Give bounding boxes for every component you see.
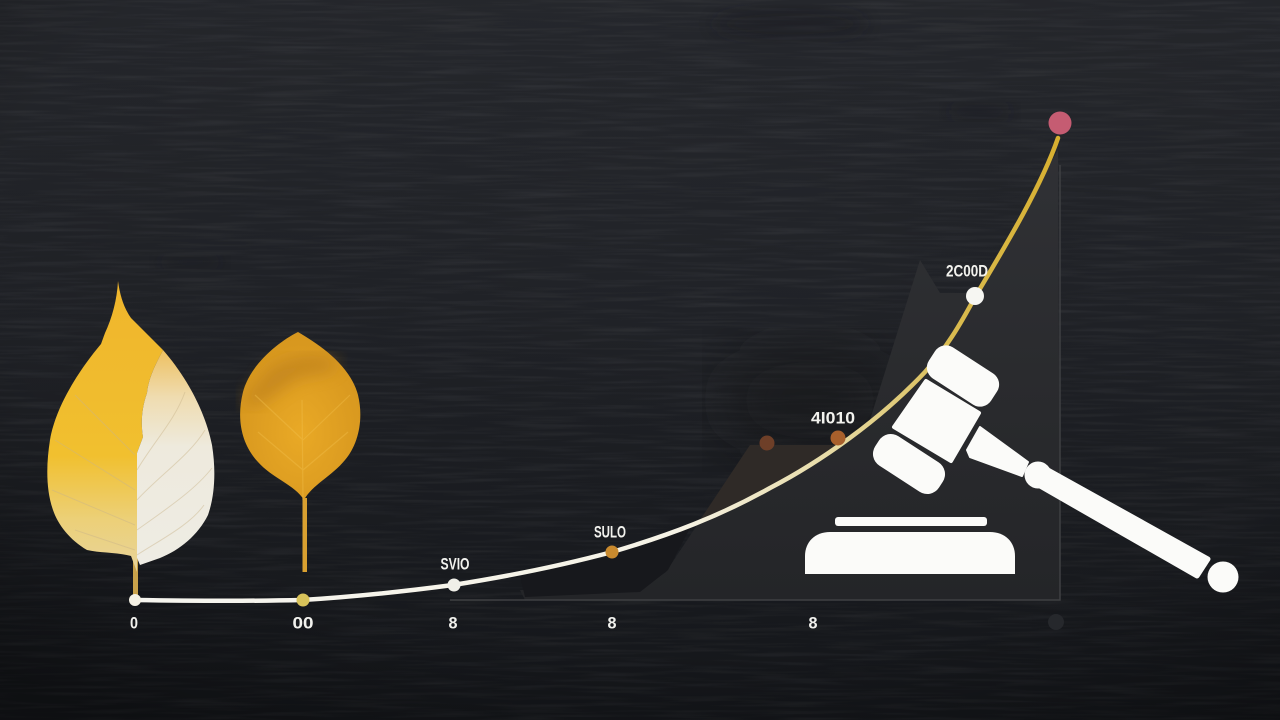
- icon: large yellow and white leaf: [47, 281, 214, 597]
- gavel handle: [1040, 470, 1208, 576]
- labels above the curve: 4I010: [811, 408, 855, 428]
- leaf stem: [302, 498, 307, 572]
- chart area: translucent grey panel under curve: [450, 150, 1060, 600]
- data points on curve: [129, 112, 1072, 606]
- leaf veins: [52, 392, 212, 555]
- gavel neck: [967, 427, 1028, 476]
- axis tick labels: 8: [608, 614, 616, 632]
- sound block base: [805, 532, 1015, 574]
- gavel head top cap: [922, 340, 1004, 412]
- faint end marker on axis: [1048, 614, 1064, 630]
- axis tick labels: 8: [448, 614, 458, 632]
- leaf stem: [133, 555, 138, 597]
- leaf veins: [255, 395, 350, 500]
- labels above the curve: 2C00D: [946, 262, 988, 280]
- darker patch: [245, 356, 338, 408]
- leaf blade: [240, 332, 360, 500]
- gavel head bottom cap: [868, 429, 950, 499]
- axis tick labels: 8: [808, 614, 818, 632]
- labels above the curve: SULO: [594, 522, 626, 542]
- axis tick labels: 00: [292, 614, 314, 632]
- icon: gavel: [805, 340, 1238, 592]
- labels above the curve: SVIO: [440, 554, 470, 574]
- gavel head body: [894, 381, 979, 461]
- sound block top plate: [835, 517, 987, 526]
- gavel end ball: [1208, 562, 1238, 592]
- leaf blade, yellow side: [47, 281, 163, 572]
- axis tick labels: [130, 614, 818, 632]
- labels above the curve: [440, 262, 988, 574]
- icon: small amber leaf: [240, 332, 360, 572]
- axis tick labels: 0: [130, 614, 138, 632]
- gavel collar: [1024, 462, 1052, 488]
- leaf blade, white side: [137, 350, 214, 565]
- growth curve: [134, 138, 1058, 601]
